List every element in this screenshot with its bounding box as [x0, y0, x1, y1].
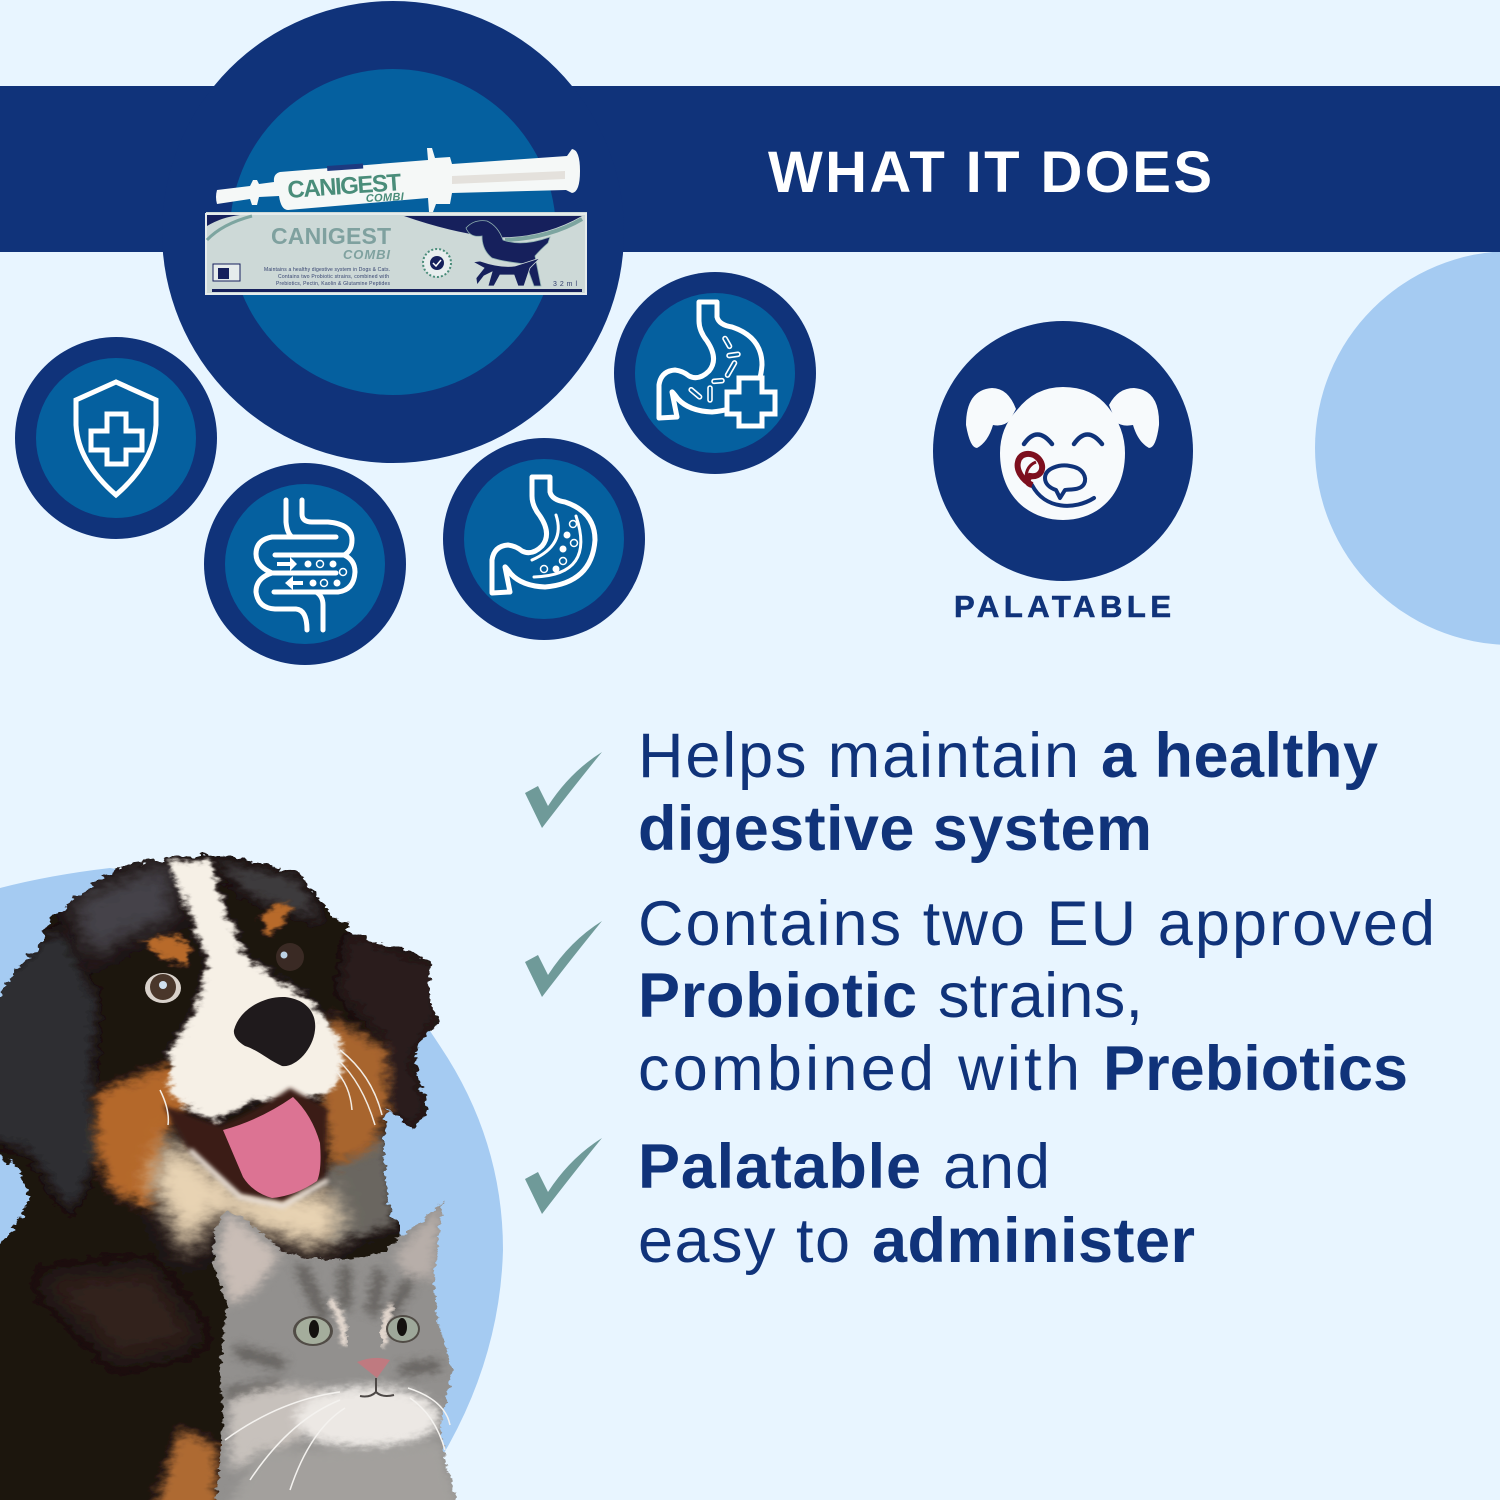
cat nose: [357, 1358, 390, 1378]
box: Contains two Probiotic strains, combined with: [278, 274, 389, 280]
icon: stomach: [443, 438, 645, 640]
cat illustration: [211, 1200, 457, 1500]
dog chest tan: [147, 1429, 217, 1500]
cat right ear inner: [395, 1205, 441, 1280]
dog left brow: [143, 936, 190, 965]
cat whiskers: [225, 1388, 450, 1490]
product: syringe and box: [206, 148, 587, 294]
bullet 1: [525, 721, 1378, 864]
icon: shield: [15, 337, 217, 539]
header band: [0, 86, 1500, 252]
dog right ear: [340, 935, 435, 1130]
title: WHAT IT DOES: [768, 140, 1212, 205]
box: Maintains a healthy digestive system in Dogs & Cats.: [264, 267, 390, 273]
syringe: [216, 148, 580, 212]
bullet 2 text: Prebiotics: [1103, 1034, 1408, 1104]
cat right brow: [383, 1305, 392, 1345]
pet backdrop blob: [0, 868, 503, 1500]
dog lower lip: [190, 1150, 328, 1206]
bullet 3 text: easy to: [638, 1206, 850, 1276]
dog nose: [234, 997, 315, 1066]
bullet 1 text: a healthy: [1101, 721, 1378, 791]
box: CANIGEST: [271, 223, 391, 249]
syringe: CANIGEST: [287, 169, 402, 204]
dog photo illustration: [0, 840, 440, 1500]
icon: intestine: [204, 463, 406, 665]
dog mouth: [163, 1088, 327, 1202]
bullet 2 text: [638, 889, 1435, 1104]
cat left brow: [330, 1300, 345, 1345]
dog right eye: [276, 943, 304, 971]
dog white blaze and muzzle: [167, 861, 342, 1122]
cat mouth: [360, 1378, 394, 1396]
box: Prebiotics, Pectin, Kaolin & Glutamine Peptides: [276, 281, 390, 287]
icon: stomach with probiotics and plus: [614, 272, 816, 474]
cat left eye: [293, 1316, 333, 1346]
dog cream chest: [148, 1135, 345, 1255]
bullet 2 text: Probiotic: [638, 961, 917, 1031]
bullet 3 text: Palatable: [638, 1132, 921, 1202]
check icon 2: [525, 921, 602, 997]
bullet 1 text: digestive system: [638, 794, 1152, 864]
dog head top fur: [70, 860, 175, 960]
dog left ear: [0, 930, 100, 1210]
product circle: [162, 1, 624, 463]
bullet 3: [525, 1132, 1195, 1276]
check icon 1: [525, 752, 602, 828]
dog left orange cheek: [95, 1063, 190, 1210]
decorative circle right: [1315, 251, 1500, 645]
dog whiskers: [160, 1050, 382, 1125]
bullet 2 text: combined with: [638, 1034, 1080, 1104]
pet silhouettes on box: [466, 221, 550, 286]
cat chest: [215, 1440, 465, 1500]
dog right brow: [260, 904, 292, 938]
dog tongue: [223, 1097, 321, 1198]
bullet 2: [525, 889, 1435, 1104]
syringe: COMBI: [366, 191, 405, 205]
bullet 2 text: Contains two EU approved: [638, 889, 1435, 959]
bullet 3 text: administer: [872, 1206, 1195, 1276]
bullet 3 text: [638, 1132, 1195, 1276]
box: [206, 212, 587, 294]
cat left ear inner: [218, 1212, 280, 1305]
cat cheek light: [230, 1386, 330, 1470]
dog forehead right fur: [215, 860, 320, 920]
check icon 3: [525, 1138, 602, 1214]
dog right orange cheek: [322, 1015, 388, 1168]
dog neck grey: [325, 1130, 395, 1245]
bullet 1 text: [638, 721, 1378, 864]
label: palatable: PALATABLE: [954, 589, 1171, 624]
cat white muzzle: [295, 1386, 439, 1450]
cat forehead stripes: [225, 1265, 440, 1395]
icon: palatable dog: [933, 321, 1193, 581]
cat right eye: [386, 1315, 420, 1343]
bullet 3 text: and: [943, 1132, 1050, 1202]
dog left eye: [145, 973, 181, 1003]
bullet 2 text: strains,: [938, 961, 1143, 1031]
dog chest lighter fur: [40, 1270, 200, 1360]
bullet 1 text: Helps maintain: [638, 721, 1079, 791]
box: COMBI: [343, 247, 390, 262]
box: 32ml: [553, 281, 577, 288]
